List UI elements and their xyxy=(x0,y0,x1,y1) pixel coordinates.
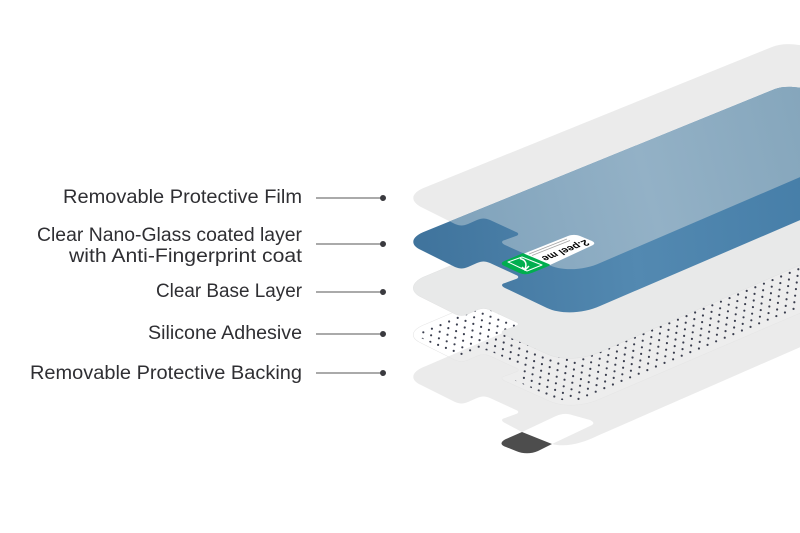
peel me sticker xyxy=(502,235,594,274)
tab: dark backing pull tab xyxy=(502,432,552,453)
layer: clear base layer xyxy=(413,115,800,358)
peel me sticker: 2.peel me xyxy=(538,238,591,263)
layer: silicone adhesive xyxy=(413,268,800,400)
label: removable protective film: Removable Protective Film xyxy=(63,187,302,208)
label: silicone adhesive xyxy=(148,323,386,344)
label: clear nano-glass coated layer xyxy=(37,225,386,267)
label: silicone adhesive: Silicone Adhesive xyxy=(148,323,302,344)
layer: removable protective backing xyxy=(413,200,800,445)
label: removable protective backing: Removable Protective Backing xyxy=(30,363,302,384)
label: clear base layer xyxy=(156,281,386,302)
layer: removable protective film xyxy=(413,44,800,269)
label: clear base layer: Clear Base Layer xyxy=(156,281,303,302)
label: clear nano-glass coated layer: with Anti-Fingerprint coat xyxy=(68,246,303,267)
label: clear nano-glass coated layer: Clear Nano-Glass coated layer xyxy=(37,225,303,246)
layer: nano-glass coated blue layer xyxy=(413,87,800,312)
